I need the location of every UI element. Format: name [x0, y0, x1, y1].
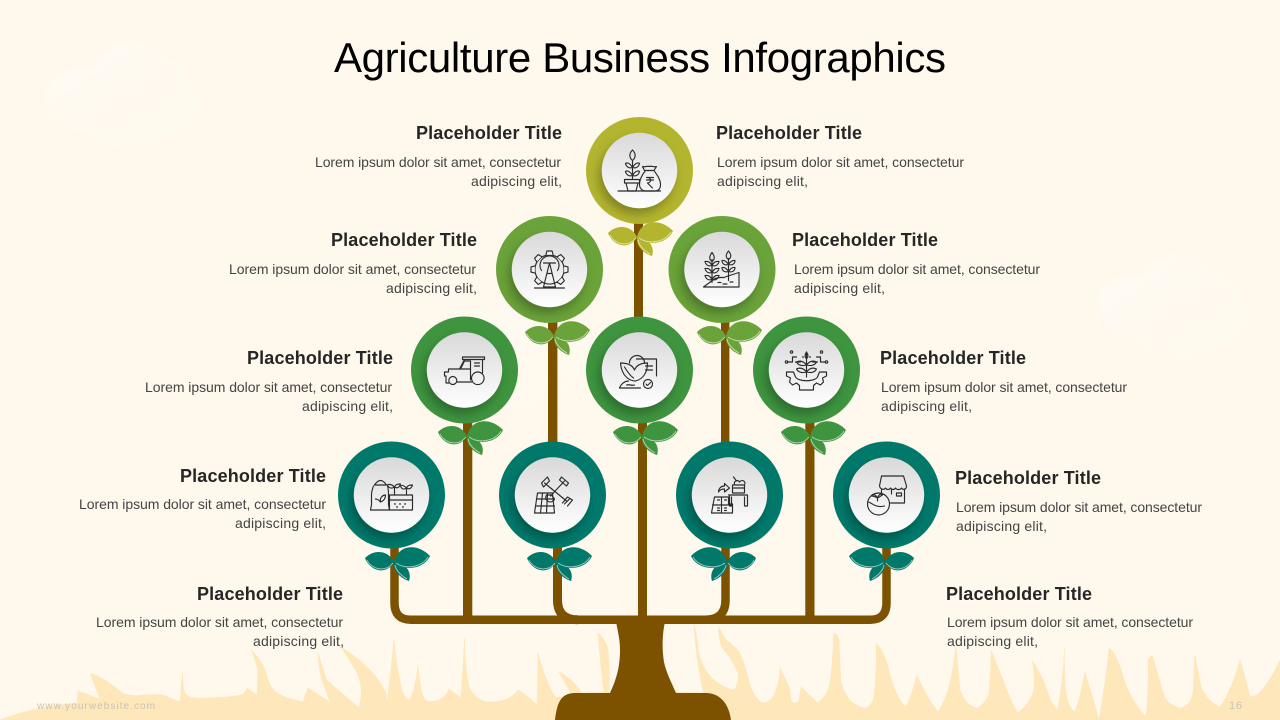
text block: third left: Placeholder Title [247, 348, 393, 368]
text block: top right [716, 123, 964, 189]
icon: gear and tower [531, 251, 568, 288]
node 4: tractor [411, 316, 518, 424]
text block: third right: adipiscing elit, [881, 398, 972, 414]
leaves: fourth row third [691, 547, 756, 581]
text block: second right: Lorem ipsum dolor sit amet, consectetur [794, 261, 1040, 277]
text block: second right: Placeholder Title [792, 230, 938, 250]
text block: third left: Lorem ipsum dolor sit amet, consectetur [145, 379, 392, 395]
text block: second left: Placeholder Title [331, 230, 477, 250]
text block: second left: Lorem ipsum dolor sit amet, consectetur [229, 261, 476, 277]
node 1: plant and money bag [586, 117, 693, 224]
text block: second right [792, 230, 1040, 296]
node 10: market store and seedling [833, 442, 940, 548]
text block: second right: adipiscing elit, [794, 280, 885, 296]
text block: fourth right: adipiscing elit, [956, 518, 1047, 534]
icon: crates and harvest table [712, 477, 748, 513]
title: Agriculture Business Infographics [334, 34, 946, 81]
leaves: third row left [438, 421, 503, 455]
text block: top right: Placeholder Title [716, 123, 862, 143]
text block: third right [880, 348, 1127, 414]
icon: wheat field [704, 251, 739, 287]
text block: fifth right: adipiscing elit, [947, 633, 1038, 649]
text block: third left [145, 348, 393, 414]
stem branch inner left [558, 545, 578, 620]
straight stems [463, 220, 814, 618]
node 3: wheat field [668, 216, 776, 323]
node 5: leaves and document [586, 316, 693, 424]
text block: top left: adipiscing elit, [471, 173, 562, 189]
text block: fifth left [96, 584, 344, 649]
cloud right [1096, 255, 1254, 359]
text block: top left: Lorem ipsum dolor sit amet, consectetur [315, 154, 561, 170]
icon: plant and money bag [618, 150, 660, 191]
text block: top right: adipiscing elit, [717, 173, 808, 189]
leaves: fourth row second [527, 547, 592, 581]
grass [0, 624, 1280, 720]
leaves: fourth row fourth [849, 547, 914, 581]
text block: fifth right: Lorem ipsum dolor sit amet, consectetur [947, 614, 1193, 630]
text block: second left [229, 230, 477, 296]
node 2: gear and tower [496, 216, 603, 323]
icon: plant in half gear [785, 351, 828, 390]
leaves: top node [608, 222, 673, 256]
text block: second left: adipiscing elit, [386, 280, 477, 296]
icon: seed bag and soil [370, 480, 412, 510]
text block: fourth left [79, 466, 326, 531]
text block: fifth left: adipiscing elit, [253, 633, 344, 649]
cloud left [45, 44, 202, 149]
text block: fifth left: Lorem ipsum dolor sit amet, consectetur [96, 614, 343, 630]
text block: third left: adipiscing elit, [302, 398, 393, 414]
icon: tractor [444, 357, 484, 385]
leaves: fourth row first [365, 547, 430, 581]
text block: fourth left: Placeholder Title [180, 466, 326, 486]
node 7: seed bag and soil [338, 442, 445, 548]
text block: fifth right [946, 584, 1193, 649]
trunk [555, 622, 731, 720]
text block: top left [315, 123, 562, 189]
node 6: plant in gear [753, 316, 860, 424]
page number: 16 [1229, 700, 1242, 712]
text block: top left: Placeholder Title [416, 123, 562, 143]
leaves: third row right [781, 421, 846, 455]
icon: market store and seedling [868, 476, 906, 515]
stem branch inner right [705, 545, 726, 620]
text block: top right: Lorem ipsum dolor sit amet, consectetur [717, 154, 964, 170]
leaves: third row middle [613, 421, 678, 455]
text block: fourth right: Placeholder Title [955, 468, 1101, 488]
footer website: www.yourwebsite.com [36, 701, 155, 712]
leaves: second row left [525, 321, 590, 355]
text block: fourth left: Lorem ipsum dolor sit amet, consectetur [79, 496, 326, 512]
leaves: second row right [697, 321, 762, 355]
text block: fourth right: Lorem ipsum dolor sit amet, consectetur [956, 499, 1202, 515]
cloud centre [466, 304, 603, 418]
text block: fourth left: adipiscing elit, [235, 515, 326, 531]
text block: third right: Placeholder Title [880, 348, 1026, 368]
icon: solar panel and tools [534, 477, 572, 513]
node 9: crates and harvest table [676, 442, 783, 548]
branch frame [394, 545, 886, 620]
node 8: solar panel and tools [499, 442, 606, 548]
text block: fifth left: Placeholder Title [197, 584, 343, 604]
icon: leaves and document [620, 356, 656, 388]
text block: fourth right [955, 468, 1202, 534]
text block: third right: Lorem ipsum dolor sit amet, consectetur [881, 379, 1127, 395]
text block: fifth right: Placeholder Title [946, 584, 1092, 604]
